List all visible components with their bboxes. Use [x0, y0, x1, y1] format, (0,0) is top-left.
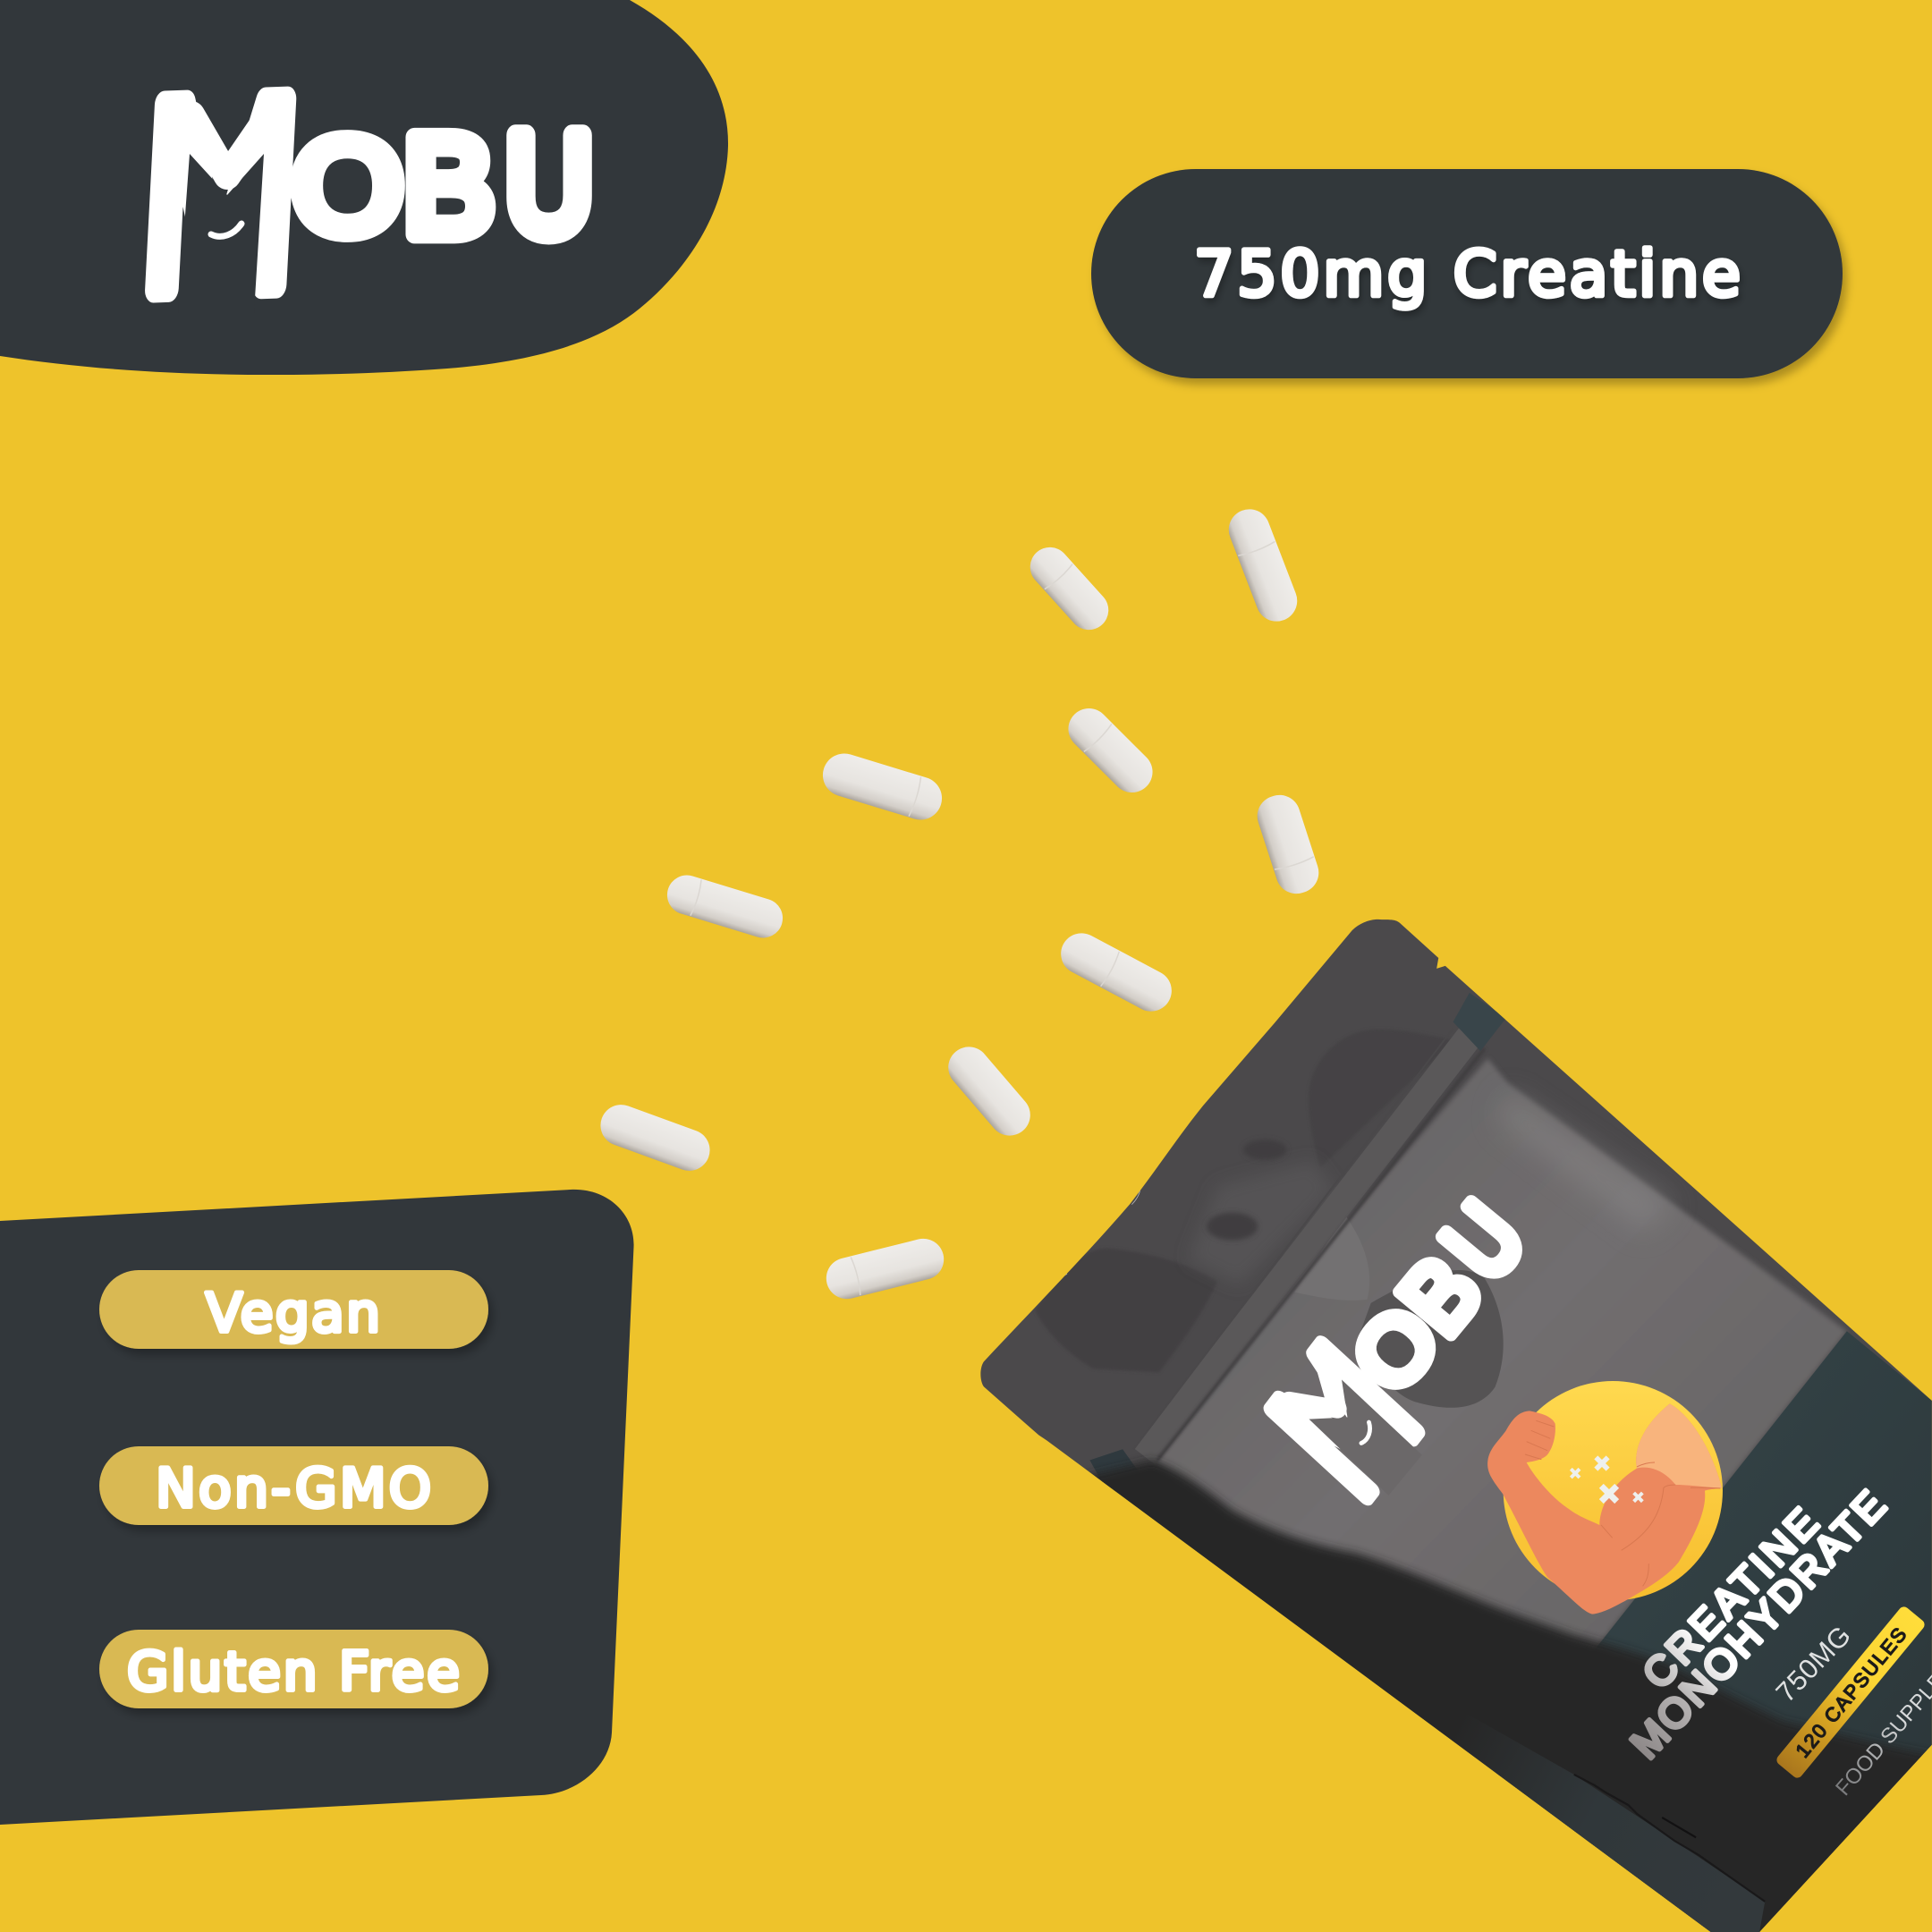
logo: MOBU: B [403, 106, 494, 265]
panel: product attributes [0, 1190, 634, 1825]
capsule 7 [1054, 926, 1179, 1019]
pill: Vegan [99, 1270, 488, 1349]
logo: MOBU: M [136, 40, 305, 347]
pill: Vegan: Vegan [206, 1283, 380, 1345]
capsule 5 [818, 749, 947, 825]
icon: flexed arm in circle [1487, 1381, 1723, 1614]
badge: 750mg Creatine [1091, 169, 1843, 378]
pill: Gluten Free [99, 1630, 488, 1708]
pouch tag: 120 capsules: 120 CAPSULES [1791, 1623, 1911, 1762]
pouch logo: B [1377, 1236, 1502, 1354]
panel: logo blob [0, 0, 728, 375]
logo: MOBU: U [506, 105, 592, 263]
capsule 9 [595, 1099, 716, 1176]
logo: MOBU: O [293, 113, 402, 260]
capsule 8 [940, 1038, 1038, 1144]
pouch tag: 120 capsules [1775, 1605, 1927, 1780]
product pouch [966, 894, 1932, 1932]
capsule 10 [822, 1234, 948, 1303]
capsule 2 [1223, 504, 1303, 627]
pouch logo: U [1423, 1184, 1545, 1299]
logo: MOBU [136, 40, 592, 347]
pouch logo: M [1235, 1309, 1453, 1533]
pill: Gluten Free: Gluten Free [127, 1640, 460, 1703]
pouch logo: O [1333, 1288, 1459, 1411]
capsule 6 [662, 870, 788, 943]
badge: 750mg Creatine: 750mg Creatine [1194, 238, 1741, 311]
pouch text: 750MG: 750MG [1770, 1620, 1857, 1708]
pouch text: CREATINE: CREATINE [1633, 1499, 1827, 1698]
pouch logo [1225, 1156, 1589, 1533]
capsules scatter [595, 504, 1324, 1303]
pouch text: MONOHYDRATE: MONOHYDRATE [1622, 1481, 1894, 1767]
capsule 4 [1252, 790, 1324, 899]
capsule 3 [1060, 699, 1161, 801]
detail in finer crop coordinates [1035, 993, 1506, 1493]
capsule 1 [1022, 539, 1116, 638]
pill: Non-GMO: Non-GMO [156, 1458, 431, 1521]
pill: Non-GMO [99, 1446, 488, 1525]
